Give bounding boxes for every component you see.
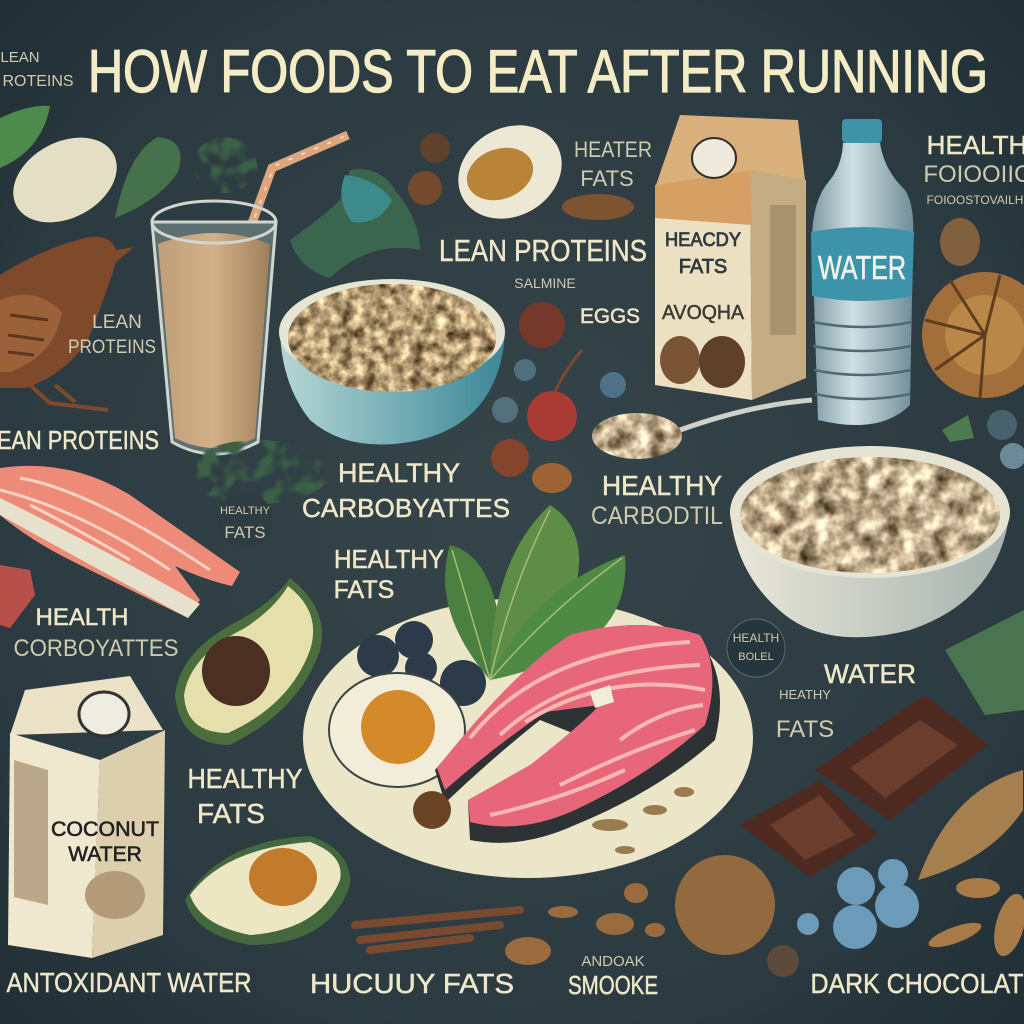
almonds bottom right	[926, 878, 1024, 960]
label: lean proteins bird: LEAN	[92, 312, 142, 333]
label: healthy fats	[334, 544, 444, 604]
label: lean proteins top left: LEAN	[0, 49, 40, 66]
label: healthy fats lower: FATS	[197, 798, 265, 829]
icon: white egg	[0, 121, 131, 239]
label: healthy carbohydrates right: HEALTHY	[602, 470, 722, 501]
icon: leaf and blue berries right	[942, 410, 1024, 469]
label: lean proteins top left: ROTEINS	[2, 73, 74, 90]
label: healthy carbohydrates right: CARBODTIL	[591, 502, 723, 530]
water bottle: WATER	[818, 249, 906, 286]
small nut	[767, 945, 799, 977]
plate	[303, 598, 753, 878]
label: eggs: EGGS	[580, 305, 640, 328]
blueberries on plate	[357, 621, 486, 706]
icon: dark leaf	[115, 137, 180, 218]
icon: coconut half	[922, 272, 1024, 398]
avocado half	[175, 578, 322, 745]
label: health foods right	[923, 130, 1024, 207]
icon: small nuts	[408, 133, 450, 205]
milk carton: healthy fats: AVOQHA	[662, 302, 745, 324]
glass with straw	[152, 135, 348, 454]
fried egg on plate	[329, 673, 465, 787]
salmon left	[0, 466, 240, 618]
avocado half lower	[185, 836, 350, 945]
label: heater fats	[574, 137, 652, 191]
blueberries right	[797, 859, 919, 949]
icon: almond	[562, 194, 634, 220]
label: healthy carbohydrates centre: CARBOBYATTES	[302, 493, 510, 523]
label: healthy fats small circle	[217, 492, 273, 548]
label: lean proteins centre: LEAN PROTEINS	[439, 233, 647, 268]
label: smoothie: SMOOKE	[568, 970, 658, 1000]
icon: bird	[0, 237, 134, 410]
milk carton: healthy fats: HEACDY	[665, 230, 741, 251]
label: lean proteins top left	[0, 49, 74, 90]
label: health carbohydrates left: CORBOYATTES	[14, 635, 178, 662]
label: smoothie	[568, 953, 658, 1000]
icon: walnut	[940, 218, 980, 266]
big bowl of oats	[730, 446, 1010, 637]
green leaves right	[945, 610, 1024, 715]
label: health foods right: FOIOOSTOVAILH	[927, 193, 1023, 207]
green smudge	[186, 440, 330, 504]
label: healthy fats: FATS	[334, 576, 394, 604]
milk carton: healthy fats	[655, 115, 806, 400]
seeds on plate	[592, 787, 694, 854]
coconut water carton	[8, 676, 165, 958]
label: lean proteins bird	[68, 312, 156, 358]
label: water: WATER	[824, 659, 916, 689]
spinach leaves	[445, 505, 625, 680]
label: antioxidant water: ANTOXIDANT WATER	[6, 967, 252, 998]
label: smoothie: ANDOAK	[581, 953, 645, 970]
strawberry	[0, 565, 35, 628]
label: healthy fats small circle: FATS	[224, 523, 266, 542]
label: healthy fats small circle: HEALTHY	[220, 505, 271, 517]
label: salmon small: SALMINE	[514, 275, 576, 291]
label: healthy small circle: BOLEL	[738, 651, 774, 663]
icon: hazelnut	[519, 302, 565, 348]
label: fats small	[776, 687, 834, 743]
round cookie	[675, 855, 775, 955]
spoon with oats	[592, 400, 812, 459]
label: lean proteins bird: PROTEINS	[68, 337, 156, 358]
greens cluster	[290, 169, 420, 278]
almonds bottom centre	[505, 883, 665, 965]
label: healthy carbohydrates centre: HEALTHY	[338, 458, 460, 488]
label: healthy fats: HEALTHY	[334, 544, 444, 574]
cinnamon sticks	[355, 910, 520, 950]
label: healthy fats lower	[188, 763, 303, 829]
dark chocolate	[740, 695, 988, 877]
green patches top	[193, 137, 257, 193]
nut on plate	[413, 791, 451, 829]
label: lean proteins left: EAN PROTEINS	[0, 425, 159, 455]
label: healthy small circle	[727, 619, 785, 677]
almond right	[918, 770, 1023, 880]
label: healthy carbohydrates centre	[302, 458, 510, 523]
label: heater fats: FATS	[580, 166, 634, 191]
coconut water carton: WATER	[68, 843, 142, 866]
icon: boiled egg	[441, 107, 579, 237]
label: health carbohydrates left	[14, 604, 178, 662]
milk carton: healthy fats: FATS	[679, 256, 727, 278]
label: healthy carbohydrates right	[591, 470, 723, 530]
label: healthy small circle: HEALTH	[733, 631, 779, 645]
label: heater fats: HEATER	[574, 137, 652, 162]
bowl of oats	[279, 279, 505, 444]
label: fats small: HEATHY	[779, 687, 831, 702]
salmon steak on plate	[435, 625, 720, 843]
label: fats small: FATS	[776, 716, 834, 743]
coconut water carton: COCONUT	[51, 818, 159, 841]
label: health carbohydrates left: HEALTH	[36, 604, 128, 631]
icon: green leaf	[0, 106, 50, 168]
label: healthy fats bottom: HUCUUY FATS	[310, 968, 514, 999]
label: healthy fats lower: HEALTHY	[188, 763, 303, 794]
icon: cherry and berries	[491, 350, 626, 493]
water bottle	[811, 119, 914, 425]
